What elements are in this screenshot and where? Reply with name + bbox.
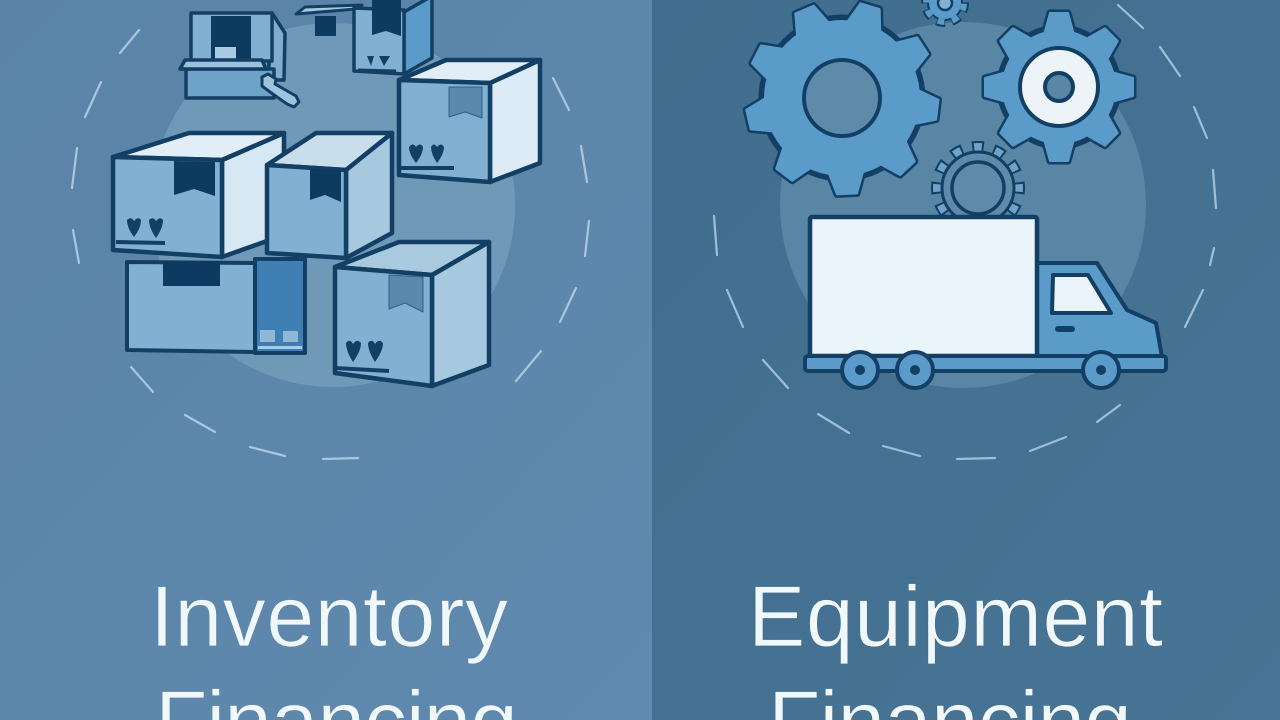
icon: medium gear	[985, 13, 1133, 161]
heading: inventory financing	[150, 569, 518, 720]
truck cab	[1037, 263, 1162, 357]
icon: bottom-left carton	[127, 259, 305, 353]
icon: lower-right carton	[335, 242, 489, 386]
icon: upper-right carton	[399, 60, 540, 182]
heading: equipment financing	[748, 569, 1163, 720]
icon: back carton, right	[354, 0, 432, 74]
background circle: inventory	[151, 23, 515, 387]
panel: inventory financing	[0, 0, 652, 720]
icon: large gear	[744, 1, 940, 195]
icon: delivery truck	[805, 217, 1166, 388]
dashed ring: inventory	[72, 30, 589, 459]
cab handle	[1055, 326, 1075, 332]
background circle: equipment	[780, 22, 1146, 388]
panel: equipment financing	[652, 0, 1280, 720]
icon: large white-sided carton	[113, 133, 284, 257]
icon: small gear behind truck	[937, 147, 1019, 229]
icon: middle carton	[267, 133, 392, 258]
cab window	[1052, 275, 1111, 313]
icon: back carton, left	[296, 5, 362, 36]
heading: equipment financing: Equipment	[748, 569, 1163, 665]
icon: open box with tape gun	[180, 13, 299, 107]
wheels	[842, 352, 1119, 388]
icon: tiny top gear	[926, 0, 964, 22]
dashed ring: equipment	[714, 5, 1216, 459]
chassis	[805, 356, 1166, 371]
cargo box	[810, 217, 1037, 356]
heading: inventory financing: Inventory	[150, 569, 508, 665]
